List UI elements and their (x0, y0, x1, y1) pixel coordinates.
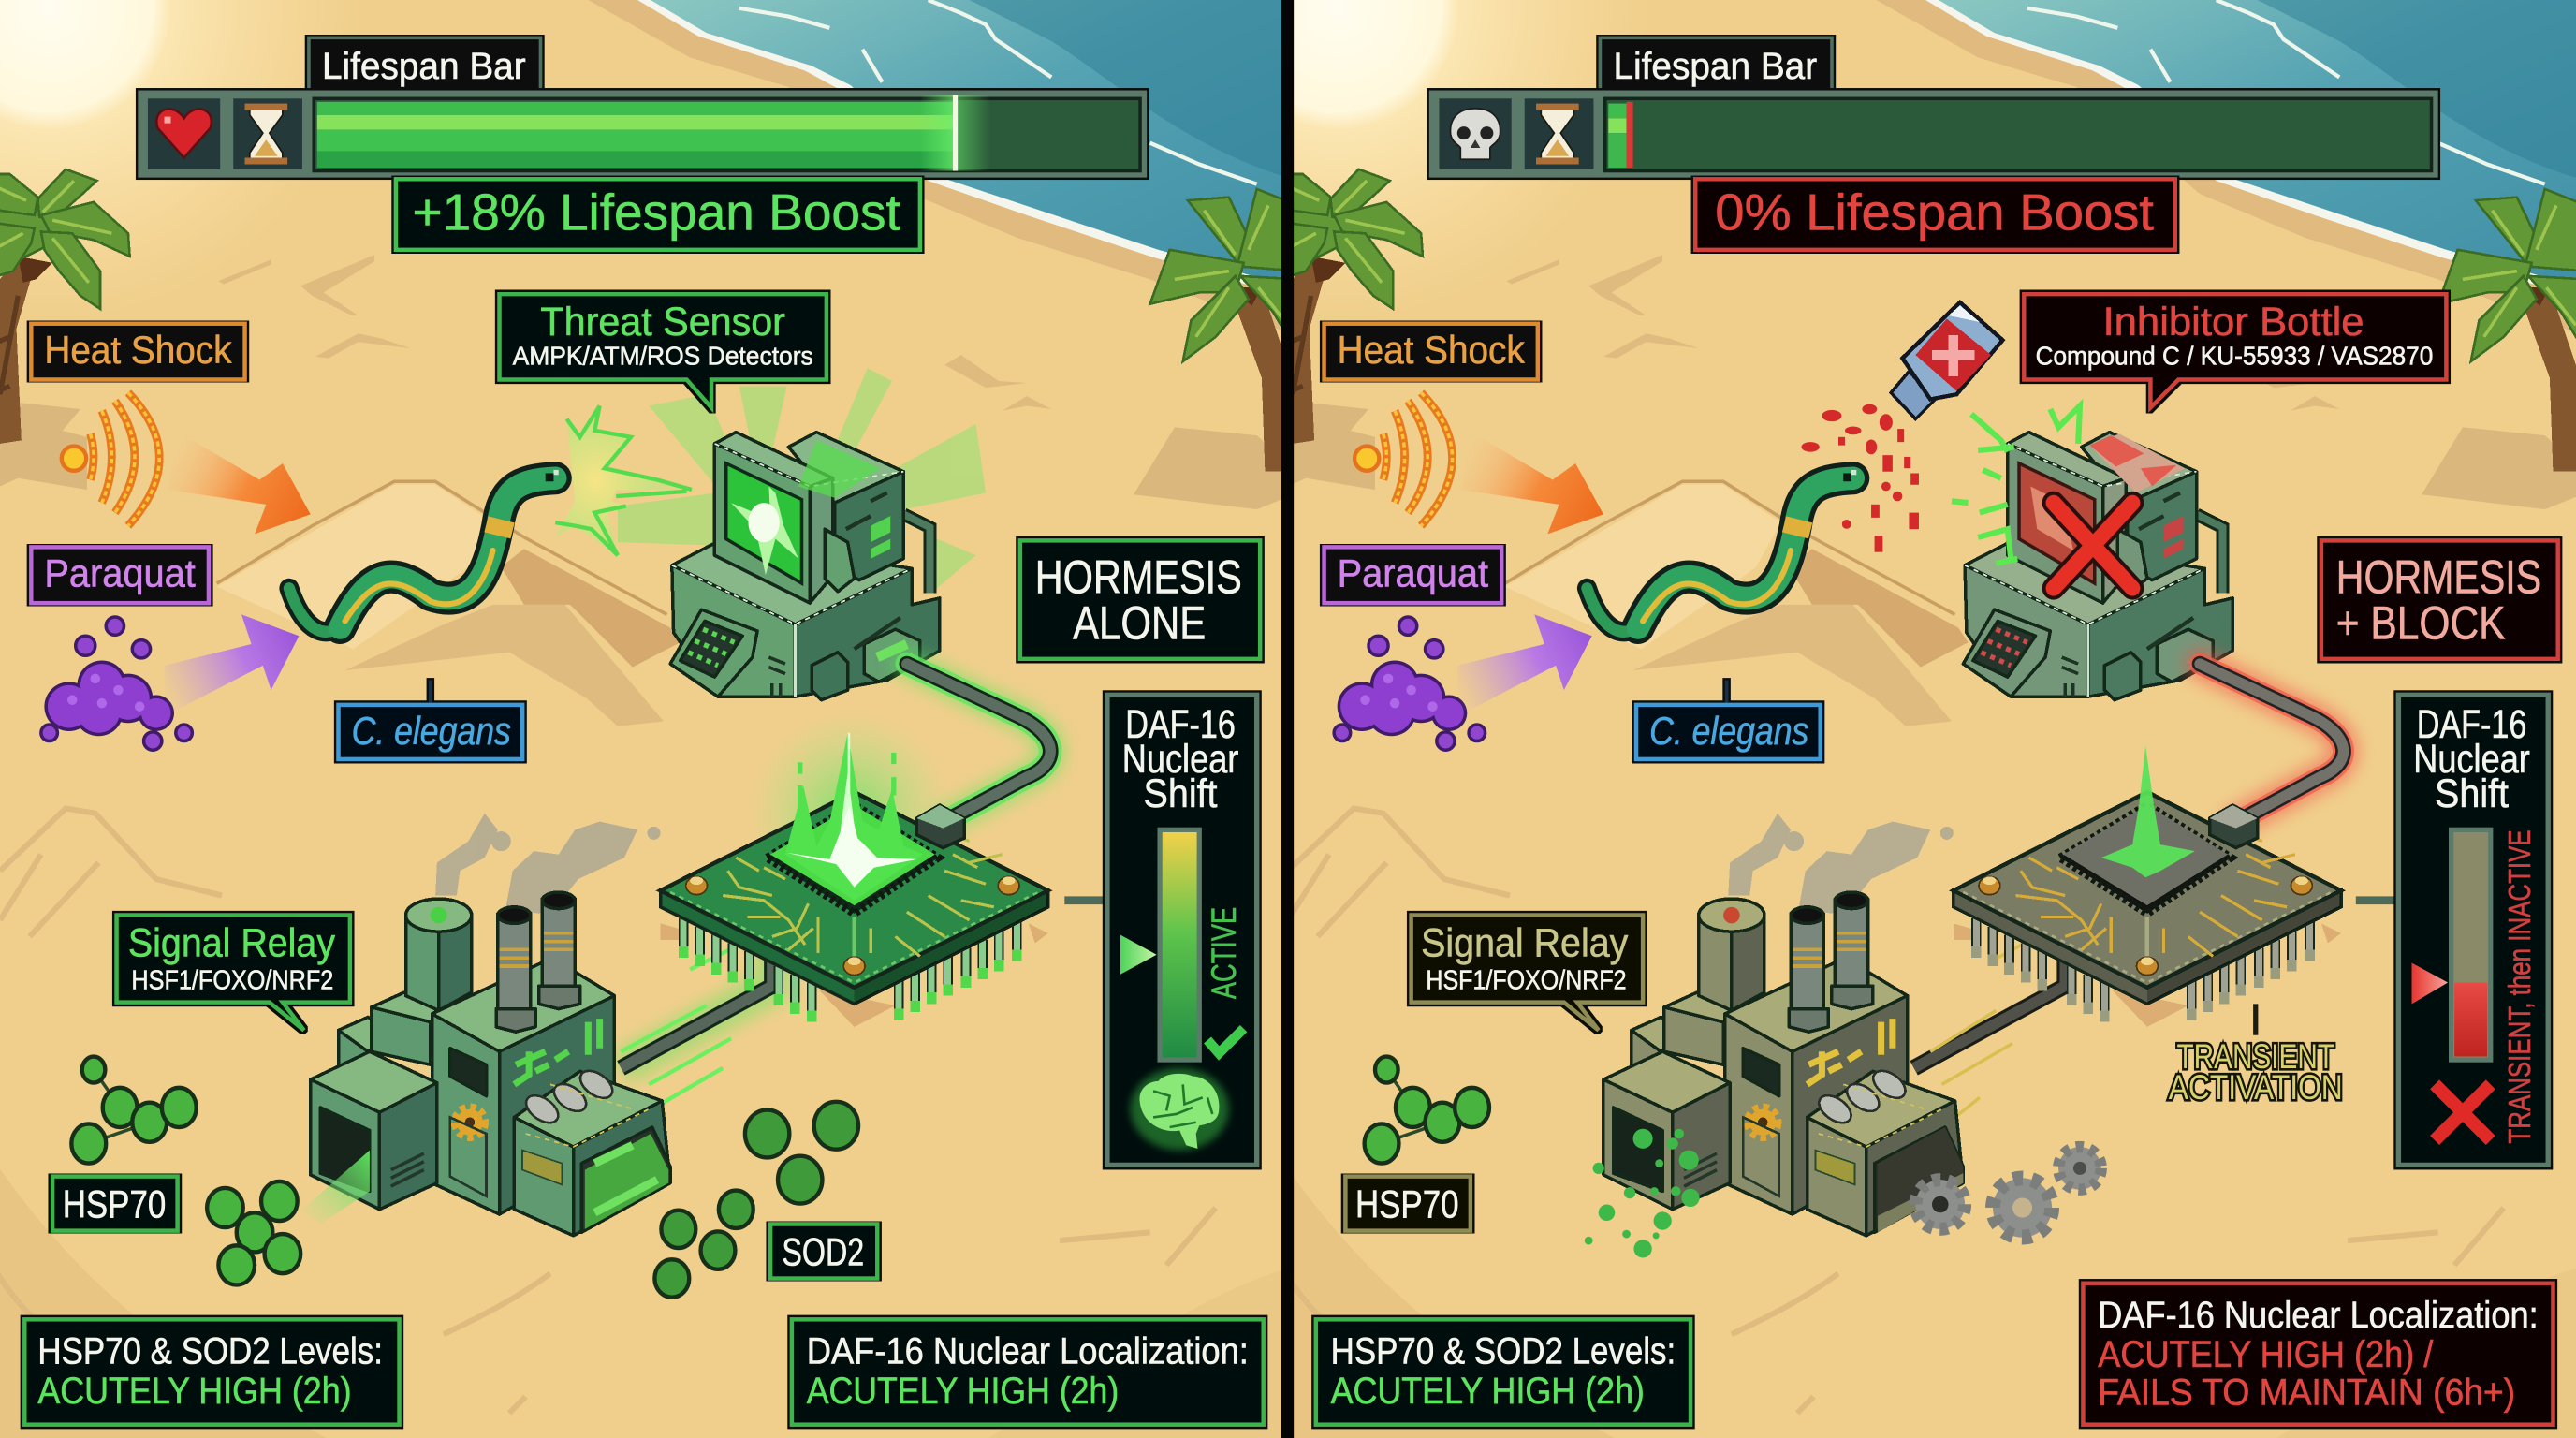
label: C. elegans (339, 681, 522, 759)
icon: scattered HSP70 fragments (1585, 1129, 1700, 1258)
label: C. elegans: C. elegans (352, 710, 511, 753)
lifespan bar frame (138, 91, 1147, 178)
lifespan bar tab (1600, 37, 1832, 94)
label: SOD2 (770, 1225, 877, 1278)
icon: stalled factory (1603, 892, 1963, 1236)
panel: DAF-16 nuclear shift active (1064, 695, 1257, 1165)
icon: broken gears (1915, 1147, 2101, 1238)
icon: heart (148, 98, 220, 169)
icon: inhibitor bottle (1891, 302, 2002, 419)
icon: green circuit chip (661, 712, 1048, 1027)
icon: paraquat blob (41, 617, 192, 750)
callout: inhibitor bottle: Inhibitor Bottle (2103, 300, 2364, 345)
callout: plus 18 percent lifespan boost: +18% Lifespan Boost (413, 184, 900, 242)
icon: hourglass (233, 98, 302, 169)
label: paraquat (31, 547, 209, 603)
text block: DAF-16 nuclear localization failure: FAILS TO MAINTAIN (6h+) (2098, 1372, 2515, 1414)
label: HSP70: HSP70 (1355, 1183, 1459, 1226)
arrow: heat to worm (1460, 431, 1603, 534)
label: hormesis alone: ALONE (1073, 597, 1206, 650)
icon: SOD2 protein cluster (654, 1102, 858, 1298)
label: transient activation (2169, 1004, 2343, 1107)
icon: signal cable from chip to factory (621, 945, 772, 1104)
panel: hormesis alone background (0, 0, 1301, 1438)
callout: signal relay: HSF1/FOXO/NRF2 (131, 966, 333, 996)
icon: glowing brain (1131, 1068, 1229, 1151)
label: transient activation: ACTIVATION (2169, 1068, 2343, 1107)
icon: threat sensor computer (670, 433, 940, 700)
label: paraquat (1325, 547, 1501, 603)
label: SOD2: SOD2 (782, 1230, 864, 1273)
panel: DAF-16 nuclear shift transient: Shift (2435, 771, 2509, 816)
arrow: heat to worm (168, 431, 311, 534)
text block: HSP70 and SOD2 levels (1316, 1319, 1690, 1425)
label: HSP70 (52, 1177, 178, 1231)
panel divider (1281, 0, 1294, 1438)
panel: right scene (1334, 302, 2344, 1258)
icon: red X (2435, 1084, 2491, 1140)
icon: hourglass (1525, 98, 1593, 169)
lifespan bar fill 18 percent (317, 95, 990, 171)
icon: check mark (1208, 1029, 1244, 1053)
callout: zero percent lifespan boost: 0% Lifespan Boost (1715, 184, 2154, 242)
icon: signal relay factory (300, 892, 670, 1236)
label: C. elegans: C. elegans (1649, 710, 1808, 753)
heading: right lifespan bar (1429, 37, 2438, 250)
text block: DAF-16 nuclear localization (792, 1319, 1264, 1425)
lifespan bar tab: Lifespan Bar (1614, 46, 1817, 87)
label: hormesis plus block (2321, 540, 2558, 659)
icon: paraquat blob (1334, 617, 1486, 750)
text block: HSP70 and SOD2 levels: ACUTELY HIGH (2h) (37, 1371, 352, 1412)
status active: ACTIVE (1205, 907, 1243, 999)
gauge marker (2411, 962, 2448, 1004)
panel: DAF-16 nuclear shift transient: DAF-16 (2417, 702, 2526, 747)
icon: skull (1439, 98, 1512, 169)
icon: glowing cable from sensor to chip (907, 664, 1050, 822)
callout: inhibitor bottle (2024, 294, 2446, 407)
icon: narrow green spike (2101, 746, 2195, 877)
icon: heat waves (1354, 392, 1453, 526)
icon: red glowing cable (2200, 664, 2344, 822)
callout: signal relay (117, 916, 350, 1030)
panel: DAF-16 nuclear shift active: DAF-16 (1125, 702, 1236, 747)
callout: threat sensor: AMPK/ATM/ROS Detectors (513, 342, 813, 371)
text block: DAF-16 nuclear localization: DAF-16 Nuclear Localization: (807, 1331, 1249, 1372)
gauge bar (2452, 829, 2491, 1060)
text block: DAF-16 nuclear localization failure: ACUTELY HIGH (2h) / (2098, 1334, 2433, 1375)
icon: faint green burst (1952, 406, 2080, 564)
lifespan bar track (314, 98, 1140, 171)
icon: blocked sensor computer (1963, 433, 2232, 700)
label: hormesis alone (1020, 540, 1260, 659)
panel: DAF-16 nuclear shift active: Shift (1144, 771, 1218, 816)
icon: HSP70 protein cluster (207, 1181, 300, 1284)
icon: red droplets (1801, 404, 1919, 552)
icon: grey circuit chip (1954, 792, 2341, 1027)
panel: DAF-16 nuclear shift transient: Nuclear (2413, 737, 2530, 782)
icon: heat waves (62, 392, 159, 526)
callout: signal relay: HSF1/FOXO/NRF2 (1426, 966, 1627, 996)
icon: smoke (435, 814, 661, 914)
text block: DAF-16 nuclear localization failure: DAF-16 Nuclear Localization: (2098, 1295, 2539, 1336)
label: heat shock: Heat Shock (44, 329, 232, 372)
label: paraquat: Paraquat (1338, 552, 1489, 595)
arrow: paraquat to worm (1457, 614, 1592, 716)
label: hormesis plus block: + BLOCK (2336, 597, 2506, 650)
panel: DAF-16 nuclear shift active: Nuclear (1122, 737, 1238, 782)
panel: left scene (41, 368, 1050, 1298)
callout: signal relay: Signal Relay (1421, 920, 1629, 965)
text block: DAF-16 nuclear localization: ACUTELY HIGH (2h) (807, 1371, 1119, 1412)
icon: smoke (1728, 814, 1954, 914)
callout: signal relay (1412, 916, 1643, 1030)
callout: inhibitor bottle: Compound C / KU-55933 / VAS2870 (2036, 342, 2433, 371)
status transient then inactive: TRANSIENT, then INACTIVE (2503, 829, 2538, 1144)
icon: green radiating rays (618, 368, 986, 592)
label: heat shock: Heat Shock (1338, 329, 1525, 372)
panel: DAF-16 nuclear shift transient (2356, 695, 2548, 1165)
panel: hormesis plus block background (1275, 0, 2576, 1438)
heading: left lifespan bar (138, 37, 1147, 250)
gauge marker (1120, 935, 1157, 975)
callout: threat sensor (500, 294, 827, 407)
icon: C. elegans worm (289, 470, 559, 632)
label: HSP70 (1345, 1177, 1471, 1231)
label: transient activation: TRANSIENT (2177, 1037, 2334, 1076)
lifespan bar fill zero percent (1608, 102, 1633, 168)
text block: HSP70 and SOD2 levels: HSP70 & SOD2 Levels: (37, 1331, 383, 1372)
lifespan bar tab (309, 37, 540, 94)
icon: HSP70 molecule (1365, 1057, 1489, 1164)
text block: HSP70 and SOD2 levels: HSP70 & SOD2 Levels: (1331, 1331, 1676, 1372)
lifespan bar track (1605, 98, 2432, 171)
label: C. elegans (1636, 681, 1821, 759)
callout: signal relay: Signal Relay (128, 920, 335, 965)
lifespan bar frame (1429, 91, 2438, 178)
text block: HSP70 and SOD2 levels (24, 1319, 399, 1425)
text block: HSP70 and SOD2 levels: ACUTELY HIGH (2h) (1331, 1371, 1645, 1412)
icon: C. elegans worm (1587, 470, 1856, 632)
icon: worm stress burst (555, 406, 692, 555)
lifespan bar tab: Lifespan Bar (322, 46, 526, 87)
arrow: paraquat to worm (165, 614, 299, 716)
label: HSP70: HSP70 (63, 1183, 166, 1226)
gauge bar (1160, 829, 1199, 1060)
icon: HSP70 molecule (71, 1057, 197, 1164)
label: paraquat: Paraquat (44, 552, 196, 595)
icon: red X over sensor (2054, 503, 2132, 588)
text block: DAF-16 nuclear localization failure (2083, 1284, 2553, 1425)
label: hormesis alone: HORMESIS (1035, 551, 1242, 604)
callout: threat sensor: Threat Sensor (540, 300, 785, 345)
icon: dim signal cable to factory (1914, 936, 2065, 1117)
